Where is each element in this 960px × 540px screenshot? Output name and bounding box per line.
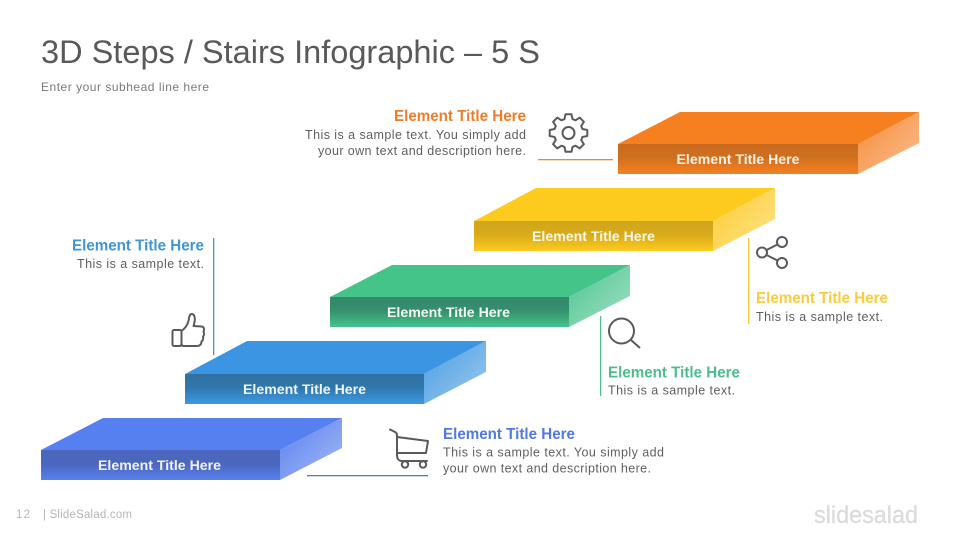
step 4: yellow — [474, 188, 775, 251]
callout: blue-violet step text: This is a sample text. You simply add — [443, 446, 664, 460]
callout: blue step text: This is a sample text. — [77, 257, 204, 271]
icon: thumbs up — [172, 314, 204, 346]
footer: page number and site: | SlideSalad.com — [43, 509, 132, 521]
title: 3D Steps / Stairs Infographic – 5 S — [41, 34, 540, 70]
callout: orange step text — [305, 108, 613, 160]
icon: gear — [550, 114, 587, 152]
step 3: green: Element Title Here — [387, 304, 510, 320]
step 5: orange — [618, 112, 919, 174]
step 2: blue: Element Title Here — [243, 381, 366, 397]
callout: orange step text: Element Title Here — [394, 108, 526, 125]
callout: yellow step text: Element Title Here — [756, 290, 888, 307]
icon: share — [757, 237, 787, 268]
callout: blue-violet step text — [307, 426, 664, 476]
callout: yellow step text: This is a sample text. — [756, 310, 883, 324]
icon: magnifier — [609, 318, 640, 348]
callout: blue-violet step text: your own text and description here. — [443, 462, 651, 476]
step 1: blue-violet: Element Title Here — [98, 457, 221, 473]
step 1: blue-violet — [41, 418, 342, 480]
callout: orange step text: your own text and description here. — [318, 144, 526, 158]
step 3: green — [330, 265, 630, 327]
step 2: blue — [185, 341, 486, 404]
step 5: orange: Element Title Here — [676, 151, 800, 167]
callout: orange step text: This is a sample text. You simply add — [305, 128, 526, 142]
callout: green step text: Element Title Here — [608, 364, 740, 382]
callout: blue step text — [72, 238, 214, 355]
step 4: yellow: Element Title Here — [532, 228, 655, 244]
icon: shopping cart — [390, 430, 428, 468]
footer: brand logo wordmark: slidesalad — [814, 502, 918, 529]
callout: blue step text: Element Title Here — [72, 238, 204, 254]
callout: green step text: This is a sample text. — [608, 384, 735, 398]
callout: yellow step text — [748, 238, 888, 324]
callout: green step text — [600, 316, 740, 398]
callout: blue-violet step text: Element Title Here — [443, 426, 575, 443]
subtitle: Enter your subhead line here — [41, 80, 209, 94]
footer: page number and site: 12 — [16, 509, 30, 521]
